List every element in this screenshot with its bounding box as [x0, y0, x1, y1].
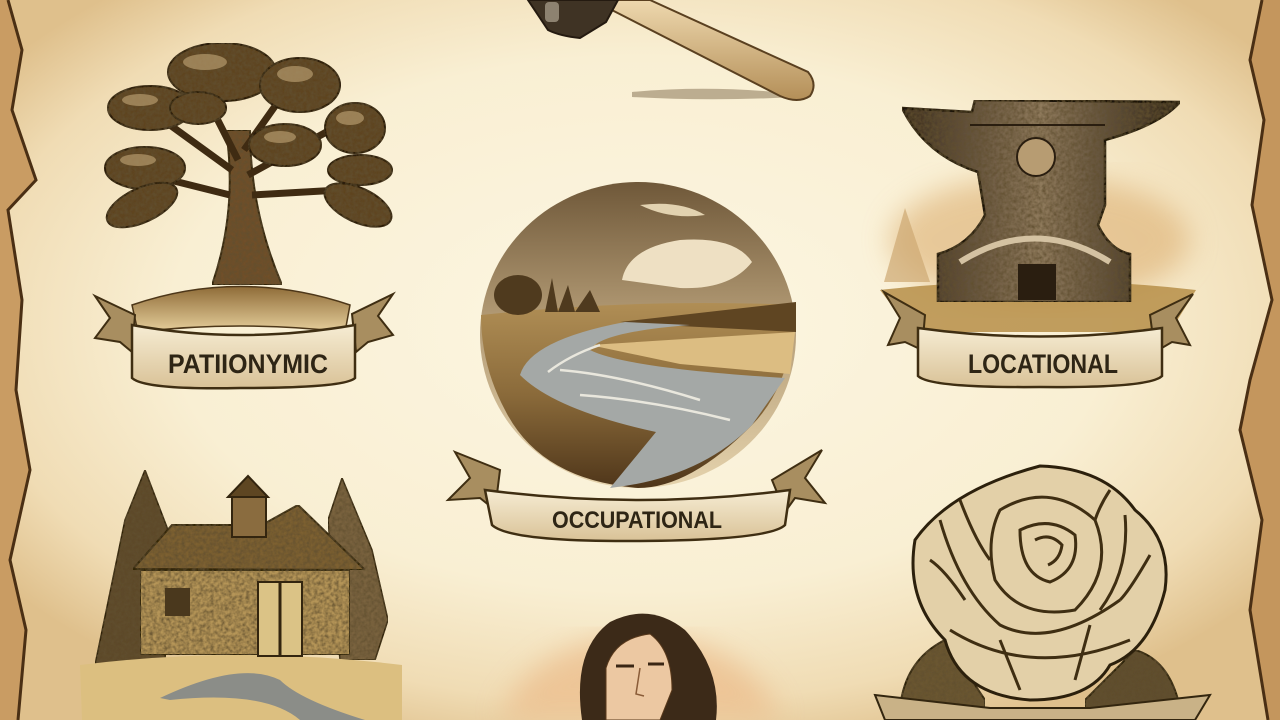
banner: locational: [884, 292, 1193, 387]
illustration: anvil: [880, 100, 1196, 332]
illustration: portrait: [500, 614, 780, 720]
banner: occupational: [448, 450, 825, 541]
banner: occupational: OCCUPATIONAL: [552, 507, 722, 534]
illustration: rose: [875, 466, 1210, 720]
icon: hammer: [528, 0, 814, 100]
banner: patronymic: PATIIONYMIC: [168, 349, 328, 379]
banner: locational: LOCATIONAL: [968, 349, 1118, 379]
banner: patronymic: [95, 294, 393, 388]
illustration: tree: [100, 43, 398, 332]
illustration: river landscape: [480, 182, 796, 488]
illustration: house: [80, 470, 402, 720]
